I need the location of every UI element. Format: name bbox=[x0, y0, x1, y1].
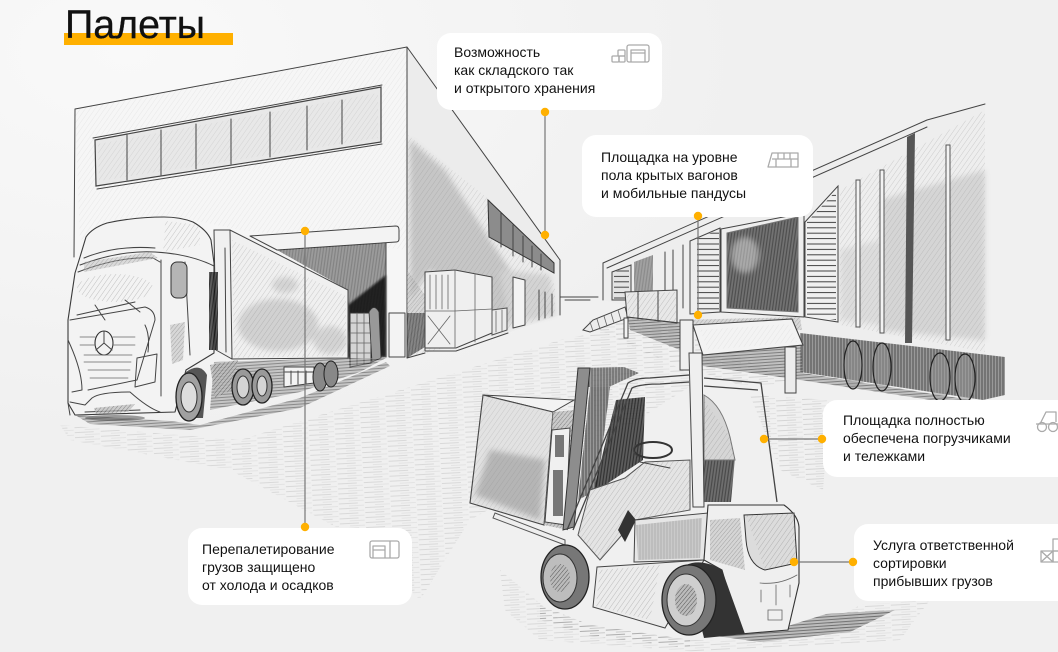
callout: forklifts and carts: обеспечена погрузчиками bbox=[843, 430, 1011, 446]
callout: forklifts and carts bbox=[823, 400, 1058, 477]
callout: forklifts and carts: и тележками bbox=[843, 448, 925, 464]
callout: forklifts and carts: Площадка полностью bbox=[843, 412, 985, 428]
callout: open and covered storage bbox=[437, 33, 662, 110]
marker dots bbox=[301, 108, 857, 566]
illustration: forklift bbox=[470, 353, 895, 648]
illustration: warehouse bbox=[74, 47, 560, 367]
leader lines bbox=[305, 112, 853, 562]
icon: covered storage bbox=[370, 541, 399, 558]
callout: sorting: Услуга ответственной bbox=[873, 537, 1014, 553]
callout: floor-level platform bbox=[582, 135, 813, 217]
ramp bbox=[583, 307, 628, 332]
title underline bbox=[64, 33, 233, 45]
icon: loader bbox=[1036, 412, 1058, 432]
canopy bbox=[250, 226, 399, 250]
callout: repalletizing: Перепалетирование bbox=[202, 541, 335, 557]
mast bbox=[580, 367, 639, 387]
callout: sorting: прибывших грузов bbox=[873, 573, 993, 589]
seat and operator area bbox=[578, 460, 690, 560]
platform bbox=[680, 317, 802, 332]
pallets in door bbox=[350, 313, 371, 367]
callout: repalletizing: грузов защищено bbox=[202, 559, 316, 575]
front wheel bbox=[541, 545, 589, 609]
crates bbox=[425, 270, 492, 348]
callout: floor-level platform: и мобильные пандусы bbox=[601, 185, 746, 201]
body bbox=[634, 513, 708, 562]
callout: floor-level platform: Площадка на уровне bbox=[601, 149, 738, 165]
rear wheel bbox=[686, 562, 745, 638]
wheels bbox=[176, 360, 338, 421]
illustration: truck bbox=[68, 217, 390, 430]
callout: open and covered storage: Возможность bbox=[454, 44, 540, 60]
icon: boxes bbox=[1041, 539, 1058, 562]
dock door bbox=[277, 243, 386, 358]
callout: open and covered storage: как складского так bbox=[454, 62, 574, 78]
callout: sorting bbox=[854, 524, 1058, 601]
illustration: freight wagons and platform bbox=[583, 104, 1005, 408]
icon: warehouse bbox=[612, 45, 649, 62]
title: Палеты bbox=[65, 3, 205, 47]
load bbox=[483, 395, 574, 412]
callout: open and covered storage: и открытого хранения bbox=[454, 80, 595, 96]
callout: repalletizing: от холода и осадков bbox=[202, 577, 334, 593]
callout: floor-level platform: пола крытых вагонов bbox=[601, 167, 738, 183]
callout: repalletizing bbox=[188, 528, 412, 605]
illustration: ground hatching bbox=[60, 297, 930, 652]
cage bbox=[567, 375, 777, 530]
chassis bbox=[210, 358, 386, 410]
cab bbox=[68, 217, 214, 415]
callout: sorting: сортировки bbox=[873, 555, 947, 571]
icon: platform bbox=[768, 153, 798, 167]
cab dark bbox=[593, 397, 645, 493]
